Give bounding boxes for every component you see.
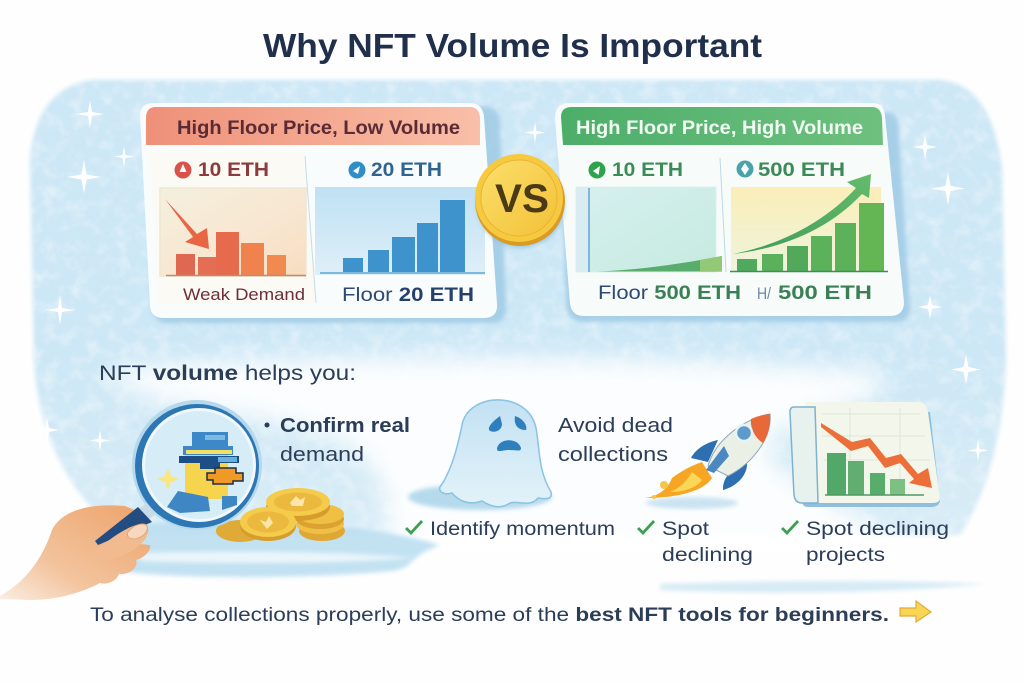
right column: 500 ETH: 500 ETH — [758, 160, 845, 181]
list item: avoid dead collections — [558, 415, 673, 466]
icon: stacked gold coins — [216, 488, 345, 542]
icon: magnifier with pixel NFT character — [95, 400, 262, 545]
list item: confirm real demand: Confirm real — [280, 415, 410, 437]
right column: 500 ETH: H/ — [757, 284, 771, 303]
bar chart: 20 ETH — [315, 187, 485, 275]
icon: rocket — [645, 414, 770, 509]
right column: 500 ETH — [598, 160, 888, 304]
checklist: spot declining projects: projects — [806, 545, 885, 566]
right column: 500 ETH: Floor 500 ETH — [598, 283, 741, 304]
chart: flat volume — [576, 187, 722, 272]
footer sentence: To analyse collections properly, use some of the best NFT tools for beginners. — [90, 605, 889, 626]
arrow: falling — [165, 199, 209, 249]
panel: high volume card — [555, 103, 910, 322]
icon: hand (thumb) — [88, 524, 148, 560]
bar chart: weak demand — [160, 188, 306, 276]
handle — [139, 503, 156, 521]
icon: declining chart — [790, 402, 940, 507]
icon: yellow arrow — [900, 601, 931, 622]
title: Why NFT Volume Is Important — [263, 27, 762, 64]
checklist: spot declining projects: Spot declining — [806, 519, 949, 540]
panel: low volume card — [140, 103, 506, 323]
card header — [146, 107, 480, 145]
checklist: spot declining projects — [782, 519, 949, 566]
left column: 10 ETH — [576, 160, 722, 272]
sparkles — [35, 100, 988, 461]
bar chart: rising — [730, 174, 888, 272]
checklist: spot declining: declining — [662, 545, 753, 566]
checklist: spot declining: Spot — [662, 519, 710, 540]
icon: hand (palm) — [0, 505, 150, 600]
list item: avoid dead collections: Avoid dead — [558, 415, 673, 437]
checklist: identify momentum: Identify momentum — [430, 519, 615, 540]
VS coin: VS — [495, 177, 549, 221]
card header: High Floor Price, High Volume — [576, 118, 863, 139]
left column: 10 ETH: Weak Demand — [183, 285, 305, 304]
right column: 500 ETH: 500 ETH — [778, 283, 872, 304]
right column: 20 ETH: 20 ETH — [371, 160, 442, 181]
card header: High Floor Price, Low Volume — [177, 118, 460, 139]
left column: 10 ETH — [150, 152, 316, 304]
card header — [561, 107, 883, 145]
list item: avoid dead collections: collections — [558, 444, 668, 466]
list item: confirm real demand: demand — [280, 444, 364, 466]
VS coin — [475, 154, 565, 248]
checklist: spot declining — [638, 519, 753, 566]
background wash — [28, 78, 1008, 594]
right column: 20 ETH — [315, 160, 485, 306]
left column: 10 ETH: 10 ETH — [198, 160, 269, 181]
subheading: NFT volume helps you: — [99, 362, 356, 385]
icon: sad ghost — [408, 400, 552, 510]
arrow: rising — [733, 174, 871, 254]
left column: 10 ETH: 10 ETH — [612, 160, 683, 181]
right column: 20 ETH: Floor 20 ETH — [342, 285, 474, 306]
pixel character — [157, 432, 243, 513]
list item: confirm real demand — [264, 415, 410, 466]
